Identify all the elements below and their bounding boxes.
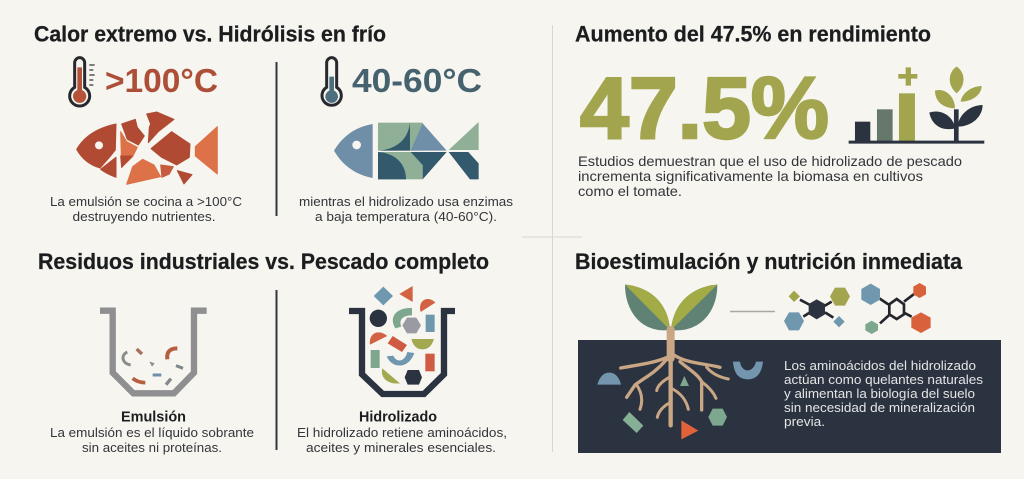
icon: whole geometric fish	[334, 122, 479, 179]
text: aminoácidos: Los aminoácidos del hidrolizado	[784, 358, 976, 373]
text: emulsión cocina: La emulsión se cocina a >100°C	[50, 194, 242, 209]
text: estudios	[578, 153, 962, 199]
icon: hot thermometer	[70, 58, 95, 106]
text: emulsión	[50, 408, 254, 455]
label: 40-60°C: 40-60°C	[352, 62, 482, 99]
heading: residuos industriales: Residuos industriales vs. Pescado completo	[38, 249, 489, 274]
heading: bioestimulación: Bioestimulación y nutrición inmediata	[575, 249, 963, 274]
big number 47.5%: 47.5%	[580, 60, 829, 157]
text: estudios: Estudios demuestran que el uso de hidrolizado de pescado	[578, 153, 962, 169]
text: hidrolizado: El hidrolizado retiene aminoácidos,	[297, 425, 507, 440]
icon: cool thermometer	[322, 58, 341, 105]
text: emulsión: Emulsión	[121, 408, 186, 426]
text: estudios: incrementa significativamente la biomasa en cultivos	[578, 168, 923, 184]
icon: broken red fish	[77, 112, 217, 184]
text: estudios: como el tomate.	[578, 183, 682, 199]
text: aminoácidos: y alimentan la biología del suelo	[784, 386, 975, 401]
icon: seedling with roots	[597, 285, 763, 439]
text: emulsión cocina: destruyendo nutrientes.	[72, 209, 216, 224]
icon: empty grey vessel with debris	[100, 311, 207, 393]
text: aminoácidos: previa.	[784, 414, 825, 429]
panel: bioestimulación	[575, 249, 1001, 453]
label: >100°C: >100°C	[105, 62, 218, 99]
icon: full dark vessel with shapes	[349, 286, 455, 394]
panel: calor extremo vs. hidrólisis en frío	[34, 22, 513, 224]
text: hidrolizado: Hidrolizado	[359, 408, 437, 426]
icon: bars and plant	[849, 67, 984, 144]
panel: aumento del 47.5%	[575, 22, 984, 199]
dark soil panel	[578, 340, 1001, 453]
icon: molecules	[784, 283, 931, 334]
text: hidrolizado enzimas: a baja temperatura (40-60°C).	[315, 209, 497, 224]
text: emulsión cocina	[50, 194, 242, 224]
connector line	[730, 310, 775, 312]
text: hidrolizado	[297, 408, 507, 455]
heading: aumento: Aumento del 47.5% en rendimiento	[575, 22, 931, 46]
heading: calor extremo: Calor extremo vs. Hidrólisis en frío	[34, 22, 386, 46]
text: emulsión: La emulsión es el líquido sobrante	[50, 425, 254, 440]
text: emulsión: sin aceites ni proteínas.	[82, 440, 222, 455]
panel: residuos industriales vs. pescado completo	[38, 249, 507, 455]
text: aminoácidos: actúan como quelantes naturales	[784, 372, 983, 387]
text: hidrolizado enzimas	[299, 194, 513, 224]
text: aminoácidos: sin necesidad de mineralización	[784, 400, 975, 415]
text: hidrolizado: aceites y minerales esenciales.	[306, 440, 496, 455]
text: aminoácidos	[784, 358, 983, 429]
text: hidrolizado enzimas: mientras el hidrolizado usa enzimas	[299, 194, 513, 209]
